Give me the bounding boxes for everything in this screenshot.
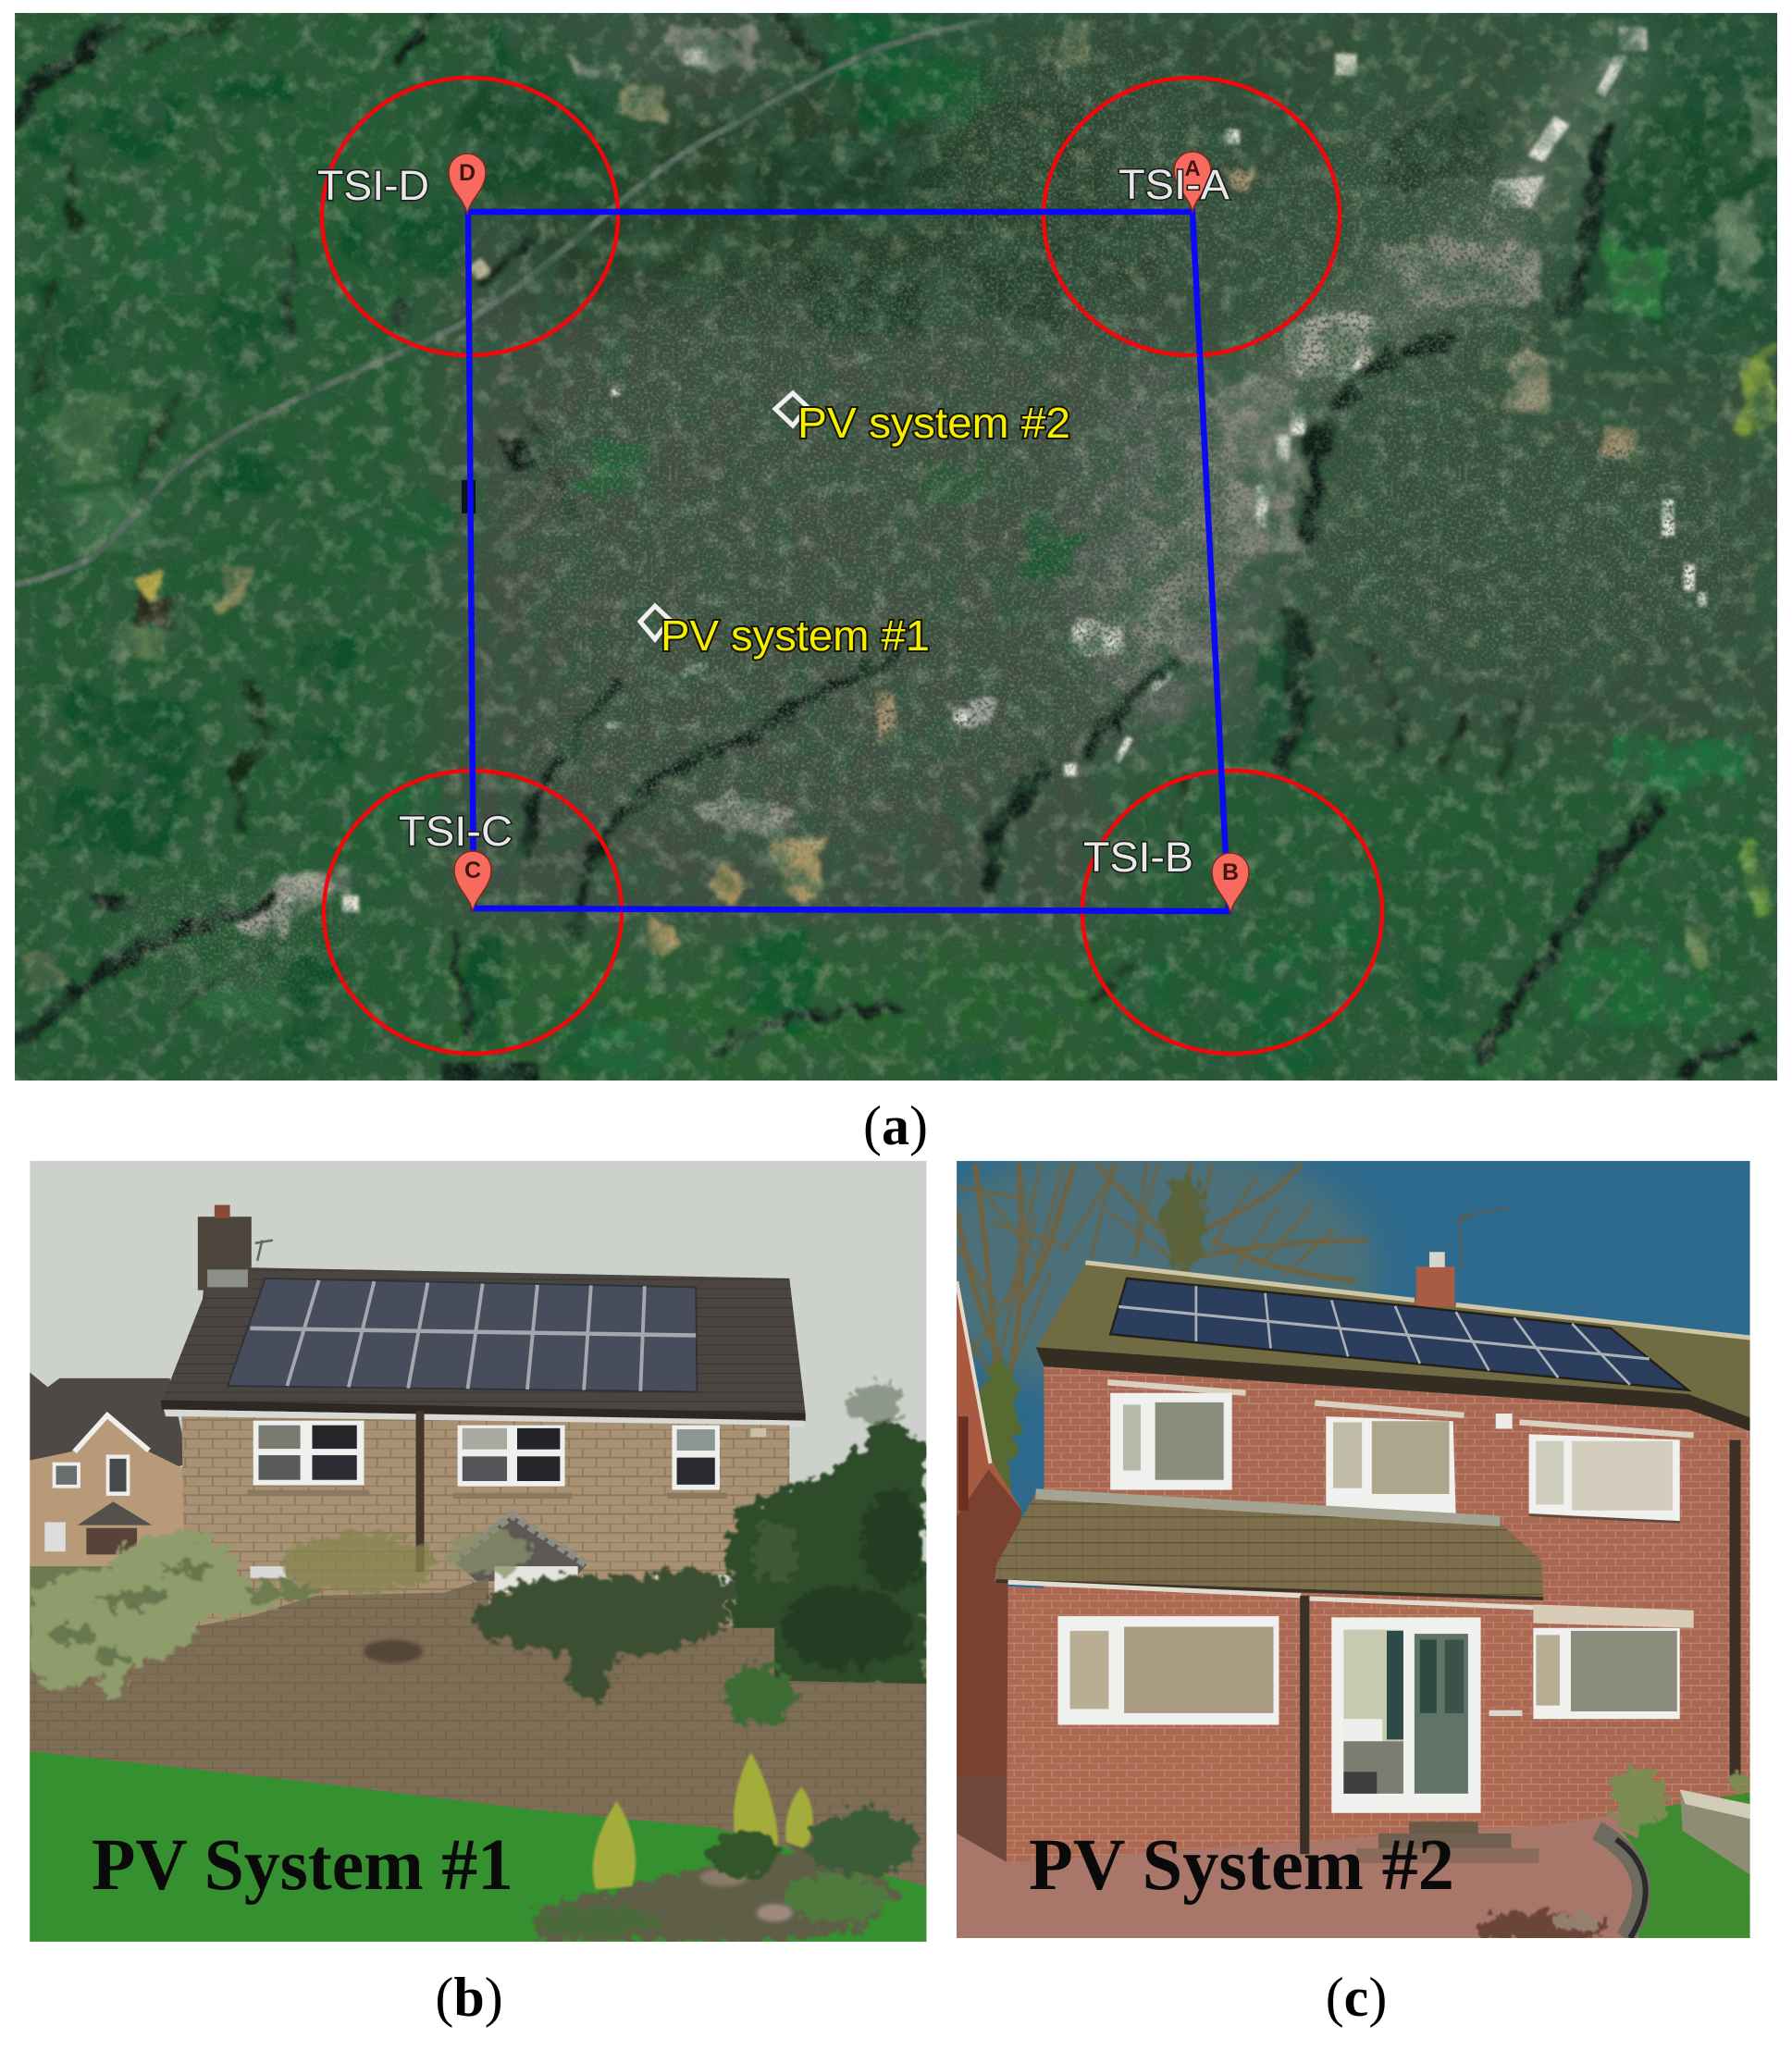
flowers <box>1473 1911 1605 1944</box>
caption (a): (a) <box>863 1095 928 1156</box>
variegated shrub <box>24 1534 315 1698</box>
dark ponds <box>86 299 538 1081</box>
tan bare ground and town patches <box>131 21 1638 958</box>
house photograph b <box>24 1161 926 1942</box>
stone blocks <box>1680 1789 1750 1874</box>
eaves <box>1036 1347 1750 1431</box>
white industrial buildings <box>287 28 1707 912</box>
antenna <box>1456 1208 1507 1271</box>
placemark PV system 2 <box>775 393 808 426</box>
built-up belt along the valley <box>1147 37 1638 666</box>
marker bar on west edge <box>462 480 476 513</box>
chimney <box>1416 1266 1455 1306</box>
caption (b): (b) <box>435 1967 503 2028</box>
pin D: D <box>459 160 476 186</box>
main roof <box>1036 1263 1750 1419</box>
blue polygon joining TSI sites <box>468 212 1229 911</box>
climbing ivy <box>474 1569 733 1704</box>
pin A: A <box>1184 156 1201 181</box>
porch downpipe <box>1300 1596 1309 1854</box>
circle: TSI-B range <box>1082 771 1382 1054</box>
circle: TSI-C range <box>324 771 622 1054</box>
caption (c): (c) <box>1326 1967 1387 2028</box>
main wall <box>181 1416 789 1634</box>
driveway <box>957 1824 1638 1938</box>
right downpipe <box>1730 1440 1740 1778</box>
pin D <box>449 154 486 215</box>
tree on right <box>723 1416 926 1686</box>
pin B <box>1212 853 1249 914</box>
upper windows <box>1110 1393 1232 1490</box>
circle: TSI-A range <box>1044 78 1340 355</box>
neighbour house <box>30 1373 200 1466</box>
conservatory roof <box>452 1515 587 1581</box>
farm fields <box>19 14 1777 1081</box>
alarm box <box>1496 1414 1513 1428</box>
conifers <box>593 1752 813 1889</box>
label TSI-A: TSI-A <box>1118 161 1230 208</box>
eaves <box>161 1400 806 1421</box>
shrub <box>1611 1766 1748 1831</box>
chimney <box>198 1216 252 1291</box>
lower wall <box>1007 1587 1536 1863</box>
pin C: C <box>464 858 481 883</box>
texture overlays <box>15 13 1777 1081</box>
left neighbour house <box>957 1276 1022 1781</box>
lower right window <box>1533 1628 1680 1719</box>
pin C <box>454 851 491 912</box>
house photograph c <box>914 1141 1750 1944</box>
satellite image background <box>0 0 1792 1110</box>
panel (c): photo of PV System 2 <box>914 1141 1750 1944</box>
pin A <box>1174 152 1211 213</box>
porch roof <box>995 1493 1543 1599</box>
steps <box>1409 1822 1478 1834</box>
placemark PV system 1 <box>640 606 670 639</box>
panel (a): satellite map with TSI sites <box>0 0 1792 1110</box>
driveway shadow <box>957 1774 1008 1863</box>
windows <box>253 1421 364 1485</box>
kerb <box>1597 1831 1641 1938</box>
solar panels <box>228 1278 697 1391</box>
flowerbed <box>530 1836 899 1942</box>
main roof <box>161 1266 806 1414</box>
label TSI-C: TSI-C <box>399 808 513 855</box>
lower left window <box>1057 1616 1279 1725</box>
label PV system 1: PV system #1 <box>661 611 930 660</box>
solar panels <box>1110 1278 1688 1390</box>
label PV system 2: PV system #2 <box>797 399 1070 447</box>
label TSI-D: TSI-D <box>317 162 429 209</box>
garden wall <box>30 1578 926 1886</box>
patio door <box>1331 1617 1481 1813</box>
label PV System 1: PV System #1 <box>92 1825 513 1906</box>
lawn <box>30 1751 926 1942</box>
grass <box>1622 1831 1750 1938</box>
main road <box>15 19 995 585</box>
bare trees <box>957 1164 1367 1493</box>
panel (b): photo of PV System 1 <box>24 1161 926 1942</box>
mid bushes <box>280 1528 530 1593</box>
label TSI-B: TSI-B <box>1083 834 1193 881</box>
label PV System 2: PV System #2 <box>1029 1825 1454 1906</box>
circle: TSI-D range <box>322 78 618 355</box>
river valleys and dark woodland <box>17 11 1753 1073</box>
upper wall <box>1044 1366 1750 1828</box>
pin B: B <box>1222 859 1239 885</box>
